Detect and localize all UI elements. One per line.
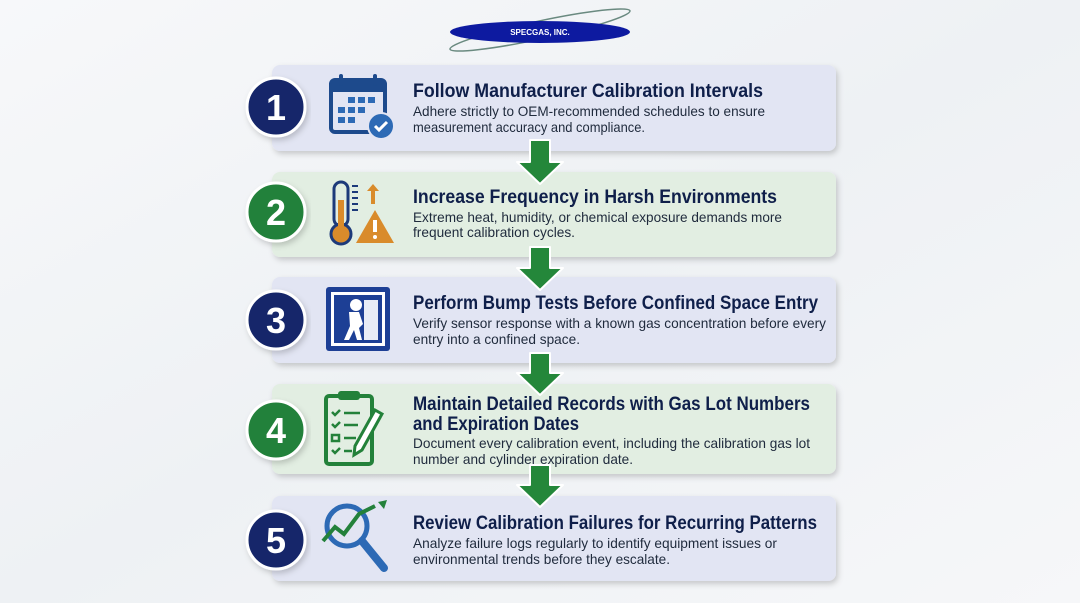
badge 3 <box>247 291 305 349</box>
badge 2 <box>247 183 305 241</box>
badge 1: 1 <box>266 87 286 128</box>
title 1: Follow Manufacturer Calibration Intervals <box>413 81 763 102</box>
desc 2: frequent calibration cycles. <box>413 224 575 240</box>
panel 5 <box>272 496 836 581</box>
arrow 1 <box>517 140 563 184</box>
logo <box>448 2 632 58</box>
title 5: Review Calibration Failures for Recurring Patterns <box>413 513 817 534</box>
badge 3: 3 <box>266 300 286 341</box>
badge 4: 4 <box>266 410 286 451</box>
icon: confined space worker <box>326 287 390 351</box>
desc 3: entry into a confined space. <box>413 331 580 347</box>
desc 4: Document every calibration event, including the calibration gas lot <box>413 435 810 451</box>
panel 2 <box>272 172 836 257</box>
badge 5 <box>247 511 305 569</box>
logo: SPECGAS, INC. <box>510 28 570 37</box>
panel 3 <box>272 277 836 363</box>
arrow 3 <box>517 353 563 395</box>
desc 4: number and cylinder expiration date. <box>413 451 633 467</box>
badge 1 <box>247 78 305 136</box>
panel 4 <box>272 384 836 474</box>
badge 2: 2 <box>266 192 286 233</box>
icon: calendar <box>331 74 394 139</box>
title 4: and Expiration Dates <box>413 414 579 435</box>
arrow 4 <box>517 465 563 507</box>
badge 4 <box>247 401 305 459</box>
title 4: Maintain Detailed Records with Gas Lot Numbers <box>413 394 810 415</box>
desc 1: measurement accuracy and compliance. <box>413 119 645 135</box>
title 2: Increase Frequency in Harsh Environments <box>413 187 777 208</box>
icon: thermometer warning <box>331 182 394 244</box>
desc 3: Verify sensor response with a known gas concentration before every <box>413 315 826 331</box>
title 3: Perform Bump Tests Before Confined Space Entry <box>413 293 818 314</box>
desc 2: Extreme heat, humidity, or chemical exposure demands more <box>413 209 782 225</box>
desc 1: Adhere strictly to OEM-recommended schedules to ensure <box>413 103 765 119</box>
panel 1 <box>272 65 836 151</box>
arrow 2 <box>517 247 563 290</box>
badge 5: 5 <box>266 520 286 561</box>
icon: magnifier trend <box>323 500 387 568</box>
icon: clipboard checklist <box>326 391 382 464</box>
desc 5: Analyze failure logs regularly to identify equipment issues or <box>413 535 777 551</box>
desc 5: environmental trends before they escalate. <box>413 551 670 567</box>
